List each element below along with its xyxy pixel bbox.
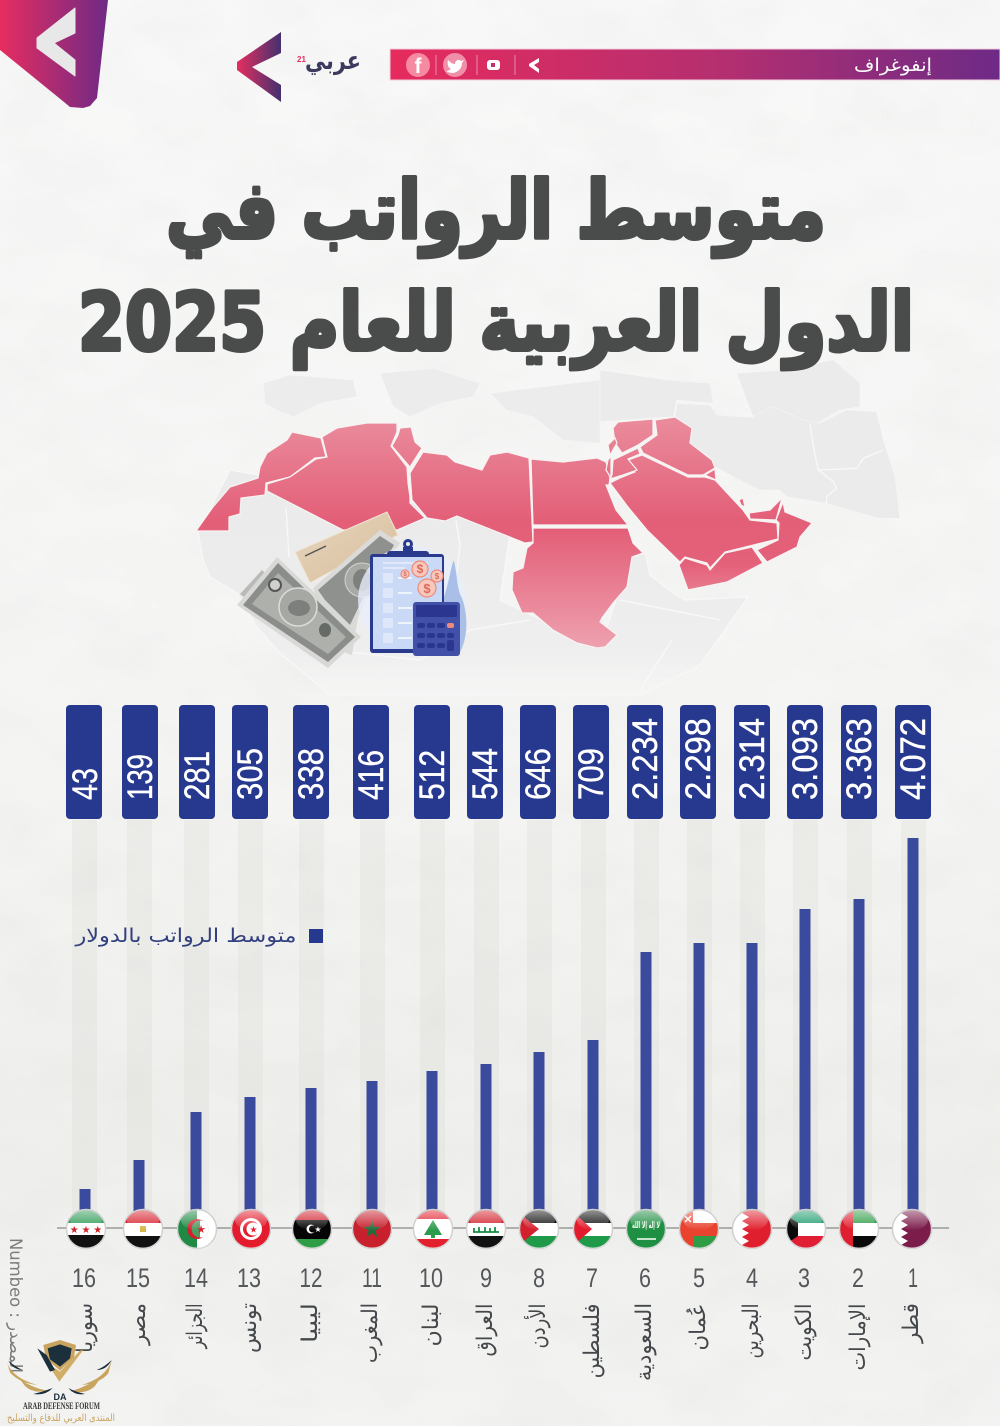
rank numbers: 4 — [746, 1263, 758, 1293]
banknotes back — [313, 530, 400, 655]
map: surrounding land — [198, 360, 900, 695]
flag: Libya — [292, 1209, 332, 1249]
blue halo — [358, 546, 466, 654]
clipboard — [370, 540, 444, 653]
Qatar — [739, 498, 745, 507]
bars — [80, 838, 918, 1228]
Libya — [410, 452, 533, 543]
flag: Lebanon — [413, 1209, 453, 1249]
values: 305 — [231, 748, 270, 800]
country names — [73, 1303, 924, 1381]
rank numbers: 2 — [852, 1263, 864, 1293]
title line 1: متوسط الرواتب في — [166, 164, 826, 258]
banknotes front — [237, 557, 361, 668]
chart: salaries by country — [57, 705, 949, 1228]
Egypt — [531, 458, 628, 525]
icon: youtube — [487, 60, 500, 70]
rank numbers: 13 — [237, 1263, 261, 1293]
envelope — [295, 512, 398, 583]
rank numbers: 9 — [480, 1263, 492, 1293]
map of the Arab world — [196, 360, 900, 695]
flag row — [66, 1209, 932, 1249]
icon: facebook — [406, 53, 430, 78]
rank numbers: 16 — [72, 1263, 96, 1293]
country names: الإمارات — [846, 1304, 871, 1370]
rank numbers: 12 — [300, 1263, 322, 1293]
icon: facebook: f — [414, 55, 422, 78]
rank numbers: 3 — [798, 1263, 810, 1293]
values: 139 — [121, 754, 160, 800]
blue flame — [443, 561, 466, 655]
coins: $ — [435, 572, 440, 581]
country names: الأردن — [524, 1304, 551, 1348]
flag: Kuwait — [786, 1209, 826, 1249]
country names: السعودية — [632, 1303, 657, 1381]
flag: Morocco: ★ — [362, 1216, 382, 1242]
Palestine — [606, 456, 611, 478]
header bar — [390, 49, 1000, 80]
values: 2.314 — [733, 718, 772, 800]
coins: $ — [417, 562, 424, 576]
values: 4.072 — [894, 718, 933, 800]
Yemen — [679, 547, 763, 590]
watermark monogram: DA — [54, 1392, 67, 1402]
rank numbers: 15 — [126, 1263, 150, 1293]
country names: ليبيا — [298, 1303, 323, 1343]
rank numbers: 5 — [693, 1263, 705, 1293]
brand logo: Arabi21: 21 — [297, 55, 306, 64]
flag: Jordan — [519, 1209, 559, 1249]
bar label: إنفوغراف — [854, 55, 932, 76]
values: 3.363 — [840, 718, 879, 800]
brand logo: Arabi21: عربي — [305, 46, 361, 76]
watermark english name: ARAB DEFENSE FORUM — [23, 1401, 100, 1411]
flag: Egypt — [123, 1209, 163, 1249]
country names: العراق — [473, 1304, 498, 1356]
country names: عُمان — [686, 1304, 711, 1350]
icon: chevron — [529, 58, 539, 73]
flag: Saudi Arabia — [626, 1209, 666, 1249]
rank numbers: 10 — [419, 1263, 443, 1293]
Saudi Arabia — [610, 455, 778, 568]
Sudan — [512, 528, 643, 648]
icon: twitter — [443, 53, 467, 77]
map: Arab countries — [196, 417, 812, 648]
Morocco — [196, 432, 326, 531]
watermark arabic name: المنتدى العربي للدفاع والتسليح — [7, 1413, 115, 1424]
rank numbers: 8 — [533, 1263, 545, 1293]
flag: Syria: ★ ★ ★ — [70, 1225, 102, 1236]
values: 43 — [66, 768, 105, 800]
flag: Qatar — [892, 1209, 932, 1249]
Jordan — [610, 448, 640, 479]
Lebanon — [608, 438, 617, 455]
rank numbers: 1 — [908, 1263, 918, 1293]
country names: الجزائر — [183, 1304, 208, 1349]
watermark emblem — [7, 1340, 112, 1394]
legend: متوسط الرواتب بالدولار — [74, 925, 296, 947]
flag: Syria — [66, 1209, 106, 1249]
values: 2.298 — [679, 718, 718, 800]
country names: سوريا — [73, 1303, 98, 1353]
values: 338 — [292, 748, 331, 800]
illustration: money, clipboard and calculator — [237, 512, 466, 668]
chart track columns — [72, 820, 926, 1228]
corner logo badge — [0, 0, 108, 108]
country names: تونس — [237, 1303, 262, 1353]
flag: Oman — [679, 1209, 719, 1249]
rank numbers: 6 — [639, 1263, 651, 1293]
flag: Algeria: ★ — [196, 1224, 206, 1236]
value tabs — [66, 705, 931, 819]
flag: Libya: ★ — [314, 1225, 322, 1234]
coins: $ — [423, 581, 431, 596]
flag: Tunisia — [231, 1209, 271, 1249]
flag: Palestine — [573, 1209, 613, 1249]
values: 2.234 — [626, 718, 665, 800]
calculator — [413, 602, 460, 656]
coins: $ — [403, 572, 407, 578]
Iraq — [640, 417, 715, 475]
source note: Numbeo : المصدر — [5, 1238, 25, 1373]
values — [66, 718, 933, 800]
Kuwait — [705, 469, 716, 480]
country names: لبنان — [419, 1304, 444, 1346]
values: 3.093 — [786, 718, 825, 800]
values: 646 — [519, 748, 558, 800]
Algeria — [267, 423, 425, 530]
UAE — [749, 498, 782, 520]
Tunisia — [392, 427, 422, 467]
flag: Algeria — [177, 1209, 217, 1249]
Oman — [757, 502, 812, 562]
flag: Tunisia: ★ — [249, 1224, 258, 1234]
coins — [401, 561, 443, 597]
country names: البحرين — [739, 1304, 764, 1358]
rank numbers: 7 — [586, 1263, 598, 1293]
flag: Morocco — [352, 1209, 392, 1249]
brand logo: Arabi21 — [237, 32, 361, 102]
country names: المغرب — [358, 1303, 383, 1363]
values: 416 — [352, 750, 391, 800]
country names: فلسطين — [580, 1304, 605, 1378]
rank numbers: 14 — [184, 1263, 208, 1293]
values: 281 — [178, 751, 217, 800]
values: 544 — [466, 748, 505, 800]
values: 512 — [413, 750, 452, 800]
flag: UAE — [839, 1209, 879, 1249]
rank numbers: 11 — [362, 1263, 382, 1293]
flag: Iraq — [466, 1209, 506, 1249]
title — [78, 164, 914, 370]
country names: مصر — [126, 1303, 151, 1346]
flag: Saudi Arabia: لا إله إلا الله — [632, 1221, 660, 1231]
flag: Bahrain — [732, 1209, 772, 1249]
rank numbers — [72, 1263, 918, 1293]
country names: قطر — [899, 1303, 924, 1344]
Syria — [613, 419, 653, 453]
values: 709 — [572, 748, 611, 800]
watermark: Arab Defense Forum — [7, 1340, 115, 1424]
country names: الكويت — [792, 1304, 817, 1360]
